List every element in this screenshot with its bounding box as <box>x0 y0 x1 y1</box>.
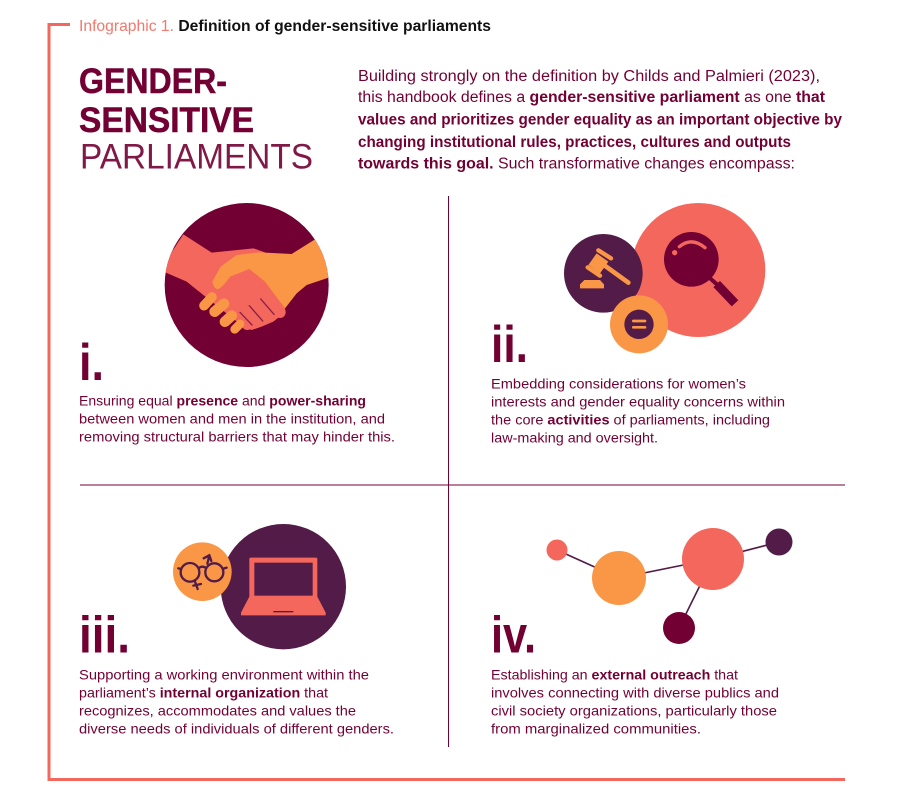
text i: removing structural barriers that may hinder this. <box>79 428 395 444</box>
intro text: values and prioritizes gender equality as an important objective by <box>358 112 842 128</box>
text ii: interests and gender equality concerns within <box>491 394 785 410</box>
text ii <box>491 376 785 446</box>
numeral iii: iii. <box>79 606 130 664</box>
numeral ii: ii. <box>491 316 528 374</box>
heading <box>79 62 313 176</box>
icon: magnifier, gavel and equals <box>564 203 765 353</box>
icon: handshake <box>160 203 332 367</box>
text iii: Supporting a working environment within the <box>79 666 369 682</box>
intro text: this handbook defines a gender-sensitive parliament as one that <box>358 89 825 106</box>
icon: network of circles <box>546 528 792 644</box>
heading: PARLIAMENTS <box>80 138 313 176</box>
panel: iii internal organization <box>79 524 394 736</box>
text ii: law-making and oversight. <box>491 430 658 446</box>
text iv: civil society organizations, particularly those <box>491 702 777 718</box>
icon: laptop and gender symbols <box>173 524 346 649</box>
intro text <box>358 68 842 172</box>
panel: iv external outreach <box>491 528 792 736</box>
text iii: diverse needs of individuals of different genders. <box>79 720 394 736</box>
intro text: changing institutional rules, practices, cultures and outputs <box>358 134 791 151</box>
text iii <box>79 666 394 736</box>
panel: i presence and power-sharing <box>79 203 395 444</box>
text i: between women and men in the institution, and <box>79 410 385 426</box>
text iv <box>491 666 779 736</box>
caption title: Infographic 1. Definition of gender-sensitive parliaments <box>79 18 491 35</box>
intro text: towards this goal. Such transformative changes encompass: <box>358 156 795 172</box>
text iv: Establishing an external outreach that <box>491 666 738 682</box>
numeral i: i. <box>79 334 104 392</box>
heading: GENDER- <box>79 62 227 101</box>
text iii: parliament’s internal organization that <box>79 684 328 700</box>
text i: Ensuring equal presence and power-sharing <box>79 392 366 408</box>
heading: SENSITIVE <box>79 101 254 140</box>
panel: ii activities <box>491 203 785 446</box>
text ii: Embedding considerations for women’s <box>491 376 746 392</box>
text i <box>79 392 395 444</box>
numeral iv: iv. <box>491 606 536 664</box>
text iii: recognizes, accommodates and values the <box>79 702 356 718</box>
intro text: Building strongly on the definition by Childs and Palmieri (2023), <box>358 68 820 85</box>
text ii: the core activities of parliaments, including <box>491 412 770 428</box>
text iv: involves connecting with diverse publics and <box>491 684 779 700</box>
text iv: from marginalized communities. <box>491 720 701 736</box>
